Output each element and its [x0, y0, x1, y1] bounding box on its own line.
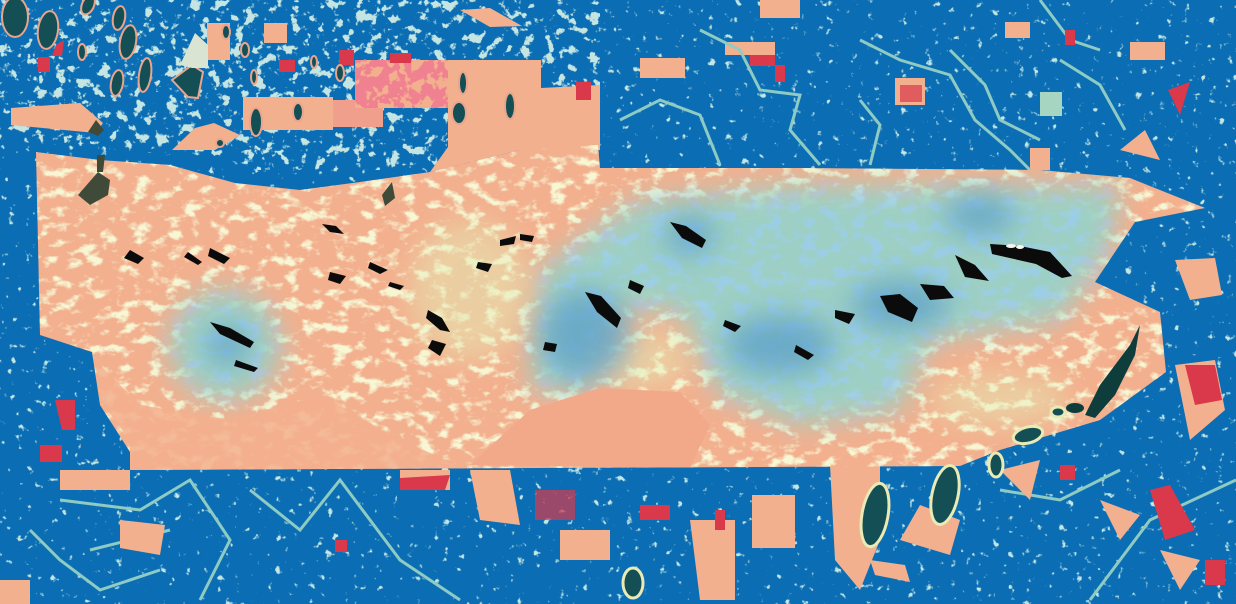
river network, bottom — [30, 530, 160, 590]
pale yellow-green transition — [410, 220, 1070, 425]
darker blue zones — [206, 195, 1015, 380]
red mottling, top centre — [355, 60, 448, 108]
snow highlights on eastern ridge — [1006, 244, 1024, 249]
bottom peach patches — [0, 360, 1225, 604]
top left mottled land — [0, 0, 600, 170]
western dark lakes — [78, 120, 395, 206]
yellow mottling — [36, 145, 1204, 470]
top right patches — [1005, 22, 1030, 38]
main study area — [36, 145, 1205, 470]
dark lake chain, east — [1066, 325, 1140, 418]
southern peach dune — [470, 388, 710, 468]
black mountain shadows — [124, 222, 1072, 372]
peach base — [36, 150, 1205, 470]
lakes, bottom right — [623, 407, 1065, 598]
teal highland zones — [154, 168, 1135, 440]
lakes, top left — [2, 0, 515, 147]
top left peach patches — [11, 0, 1222, 300]
pale lake margin — [180, 33, 208, 68]
